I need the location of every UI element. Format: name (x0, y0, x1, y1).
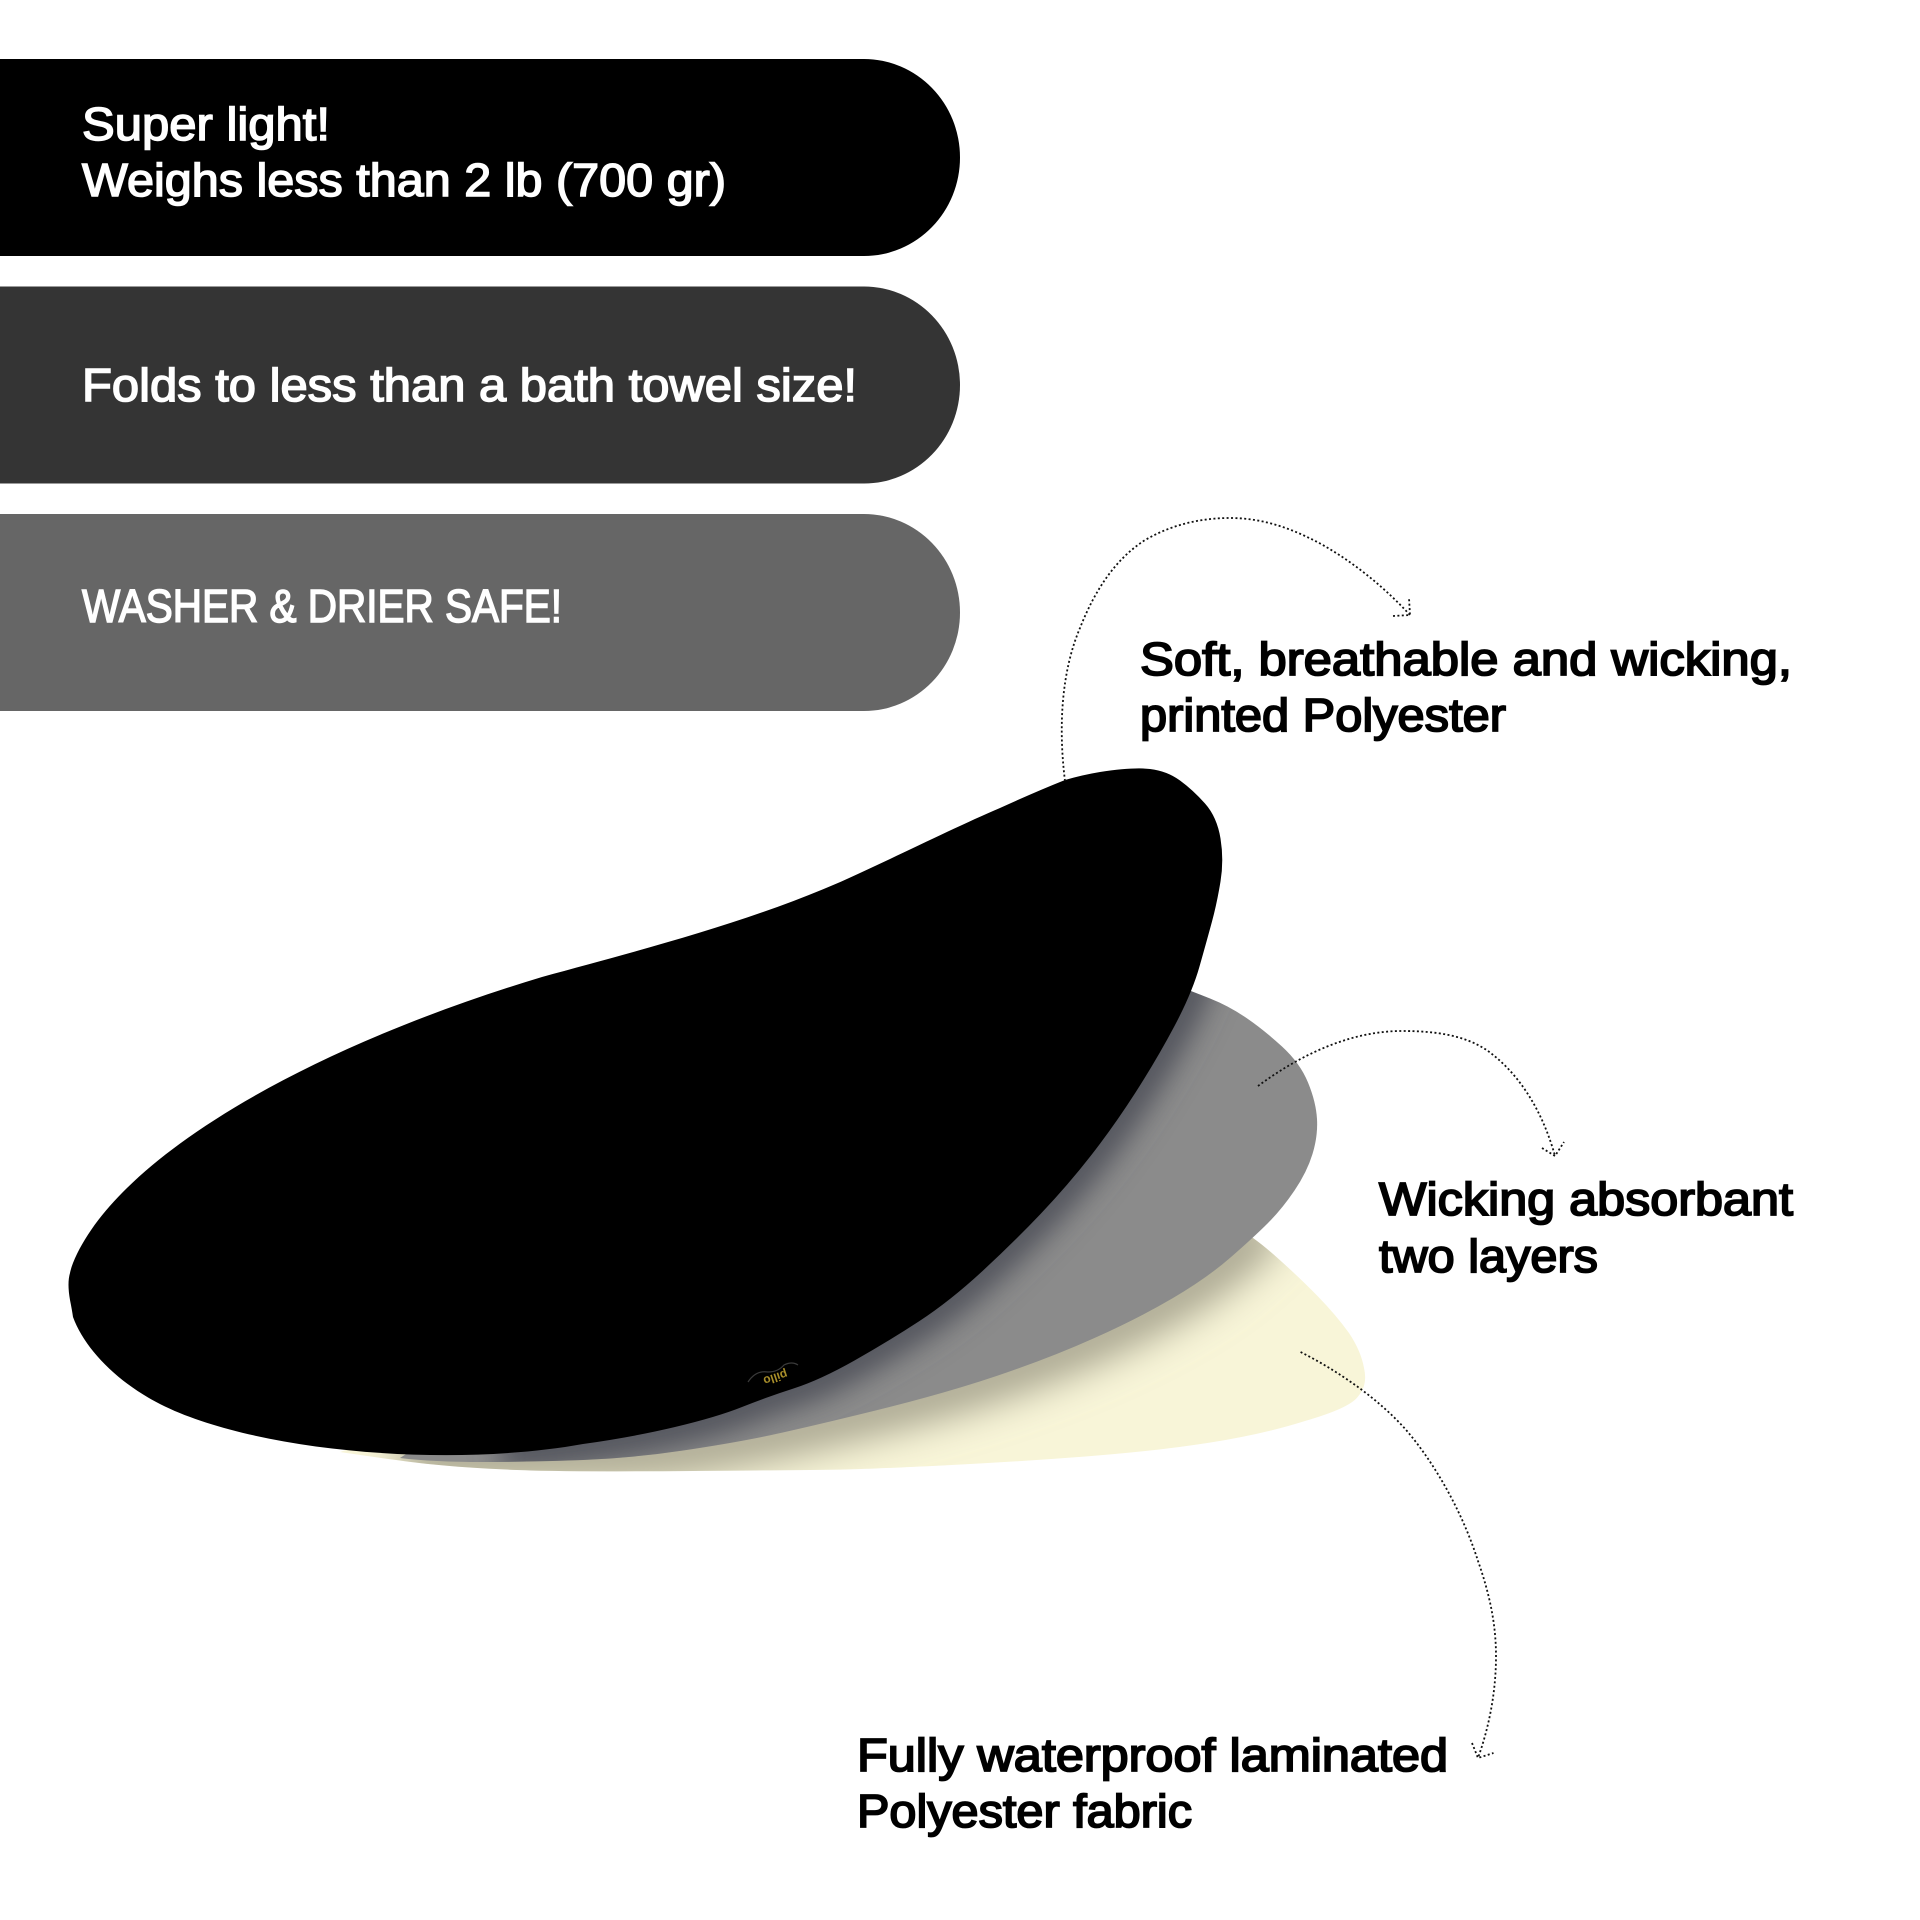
label: polyester: printed Polyester (1140, 689, 1506, 741)
text: washer safe: WASHER & DRIER SAFE! (82, 580, 562, 632)
panel: washer safe (0, 514, 960, 711)
logo (748, 1363, 798, 1388)
label: polyester: Soft, breathable and wicking, (1140, 633, 1792, 685)
label: waterproof (857, 1729, 1448, 1837)
panel: super light (0, 59, 960, 256)
text: super light: Super light! (82, 98, 330, 150)
arrow: waterproof (1301, 1352, 1496, 1758)
grey absorbent layer (400, 966, 1317, 1462)
label: absorbent: two layers (1379, 1230, 1598, 1282)
text: super light: Weighs less than 2 lb (700 gr) (82, 154, 726, 206)
arrow: absorbent (1258, 1031, 1564, 1156)
text: super light (82, 98, 726, 206)
label: absorbent: Wicking absorbant (1379, 1173, 1793, 1225)
arrow: polyester (1062, 518, 1410, 781)
text: folds: Folds to less than a bath towel size! (82, 359, 857, 411)
label: polyester (1140, 633, 1792, 741)
panel: folds (0, 286, 960, 484)
cream waterproof layer (340, 1223, 1365, 1471)
label: absorbent (1379, 1173, 1793, 1282)
logo: pillo (762, 1367, 789, 1388)
black polyester top layer (68, 768, 1222, 1455)
label: waterproof: Polyester fabric (857, 1785, 1192, 1837)
label: waterproof: Fully waterproof laminated (857, 1729, 1448, 1781)
